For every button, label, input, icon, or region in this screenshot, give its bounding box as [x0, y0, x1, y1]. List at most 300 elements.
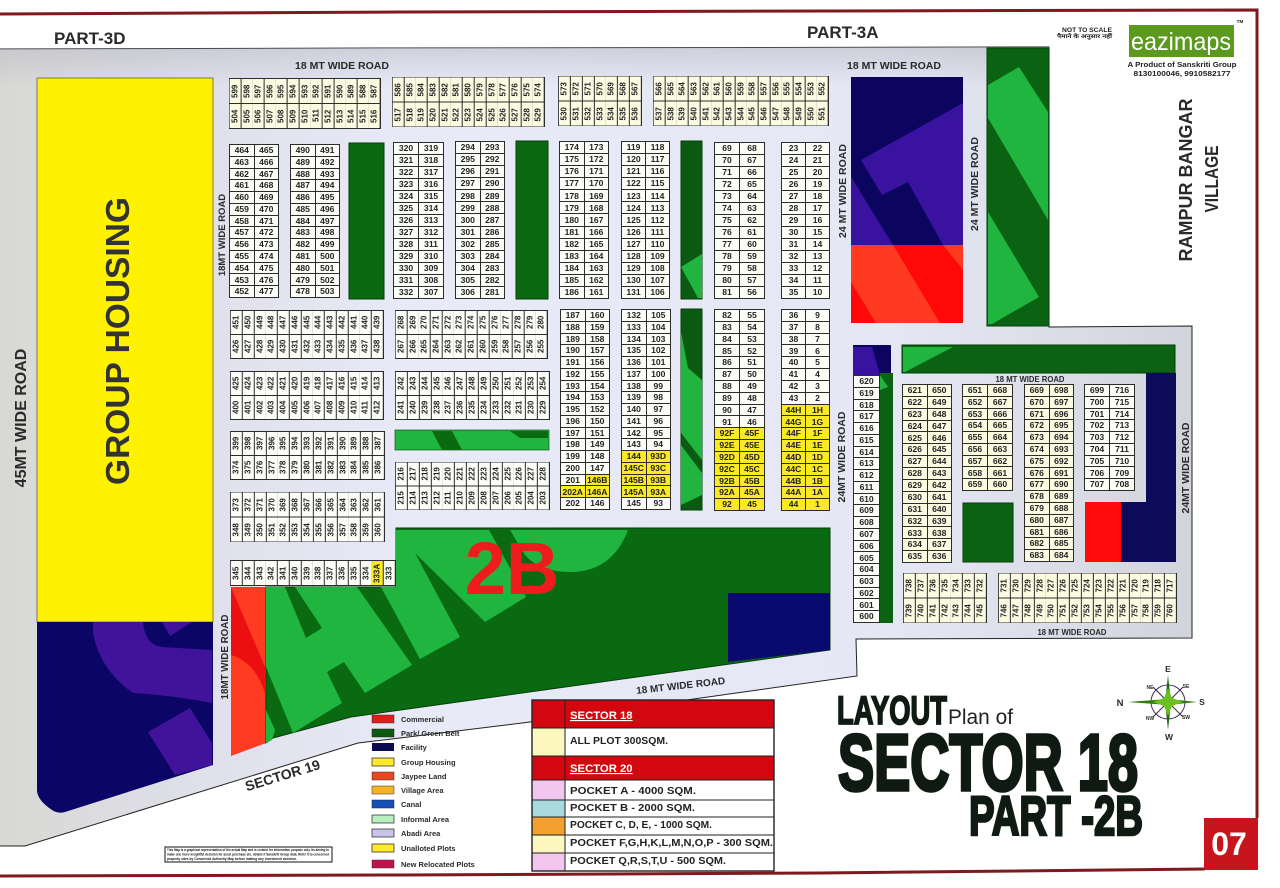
plots 621-650: 638: [932, 528, 946, 538]
plots 146-160 and 187-202: 199: [566, 451, 580, 461]
plots 10-35: 17: [813, 203, 822, 213]
plots 717-731 and 746-760: 746: [999, 604, 1008, 617]
plots 106-131: 123: [626, 191, 641, 201]
legend: Facility: [401, 743, 428, 752]
plots 599-587 and 504-516: 588: [358, 84, 367, 98]
plots 307-332: 324: [399, 191, 413, 201]
plots 146-160 and 187-202: 156: [590, 357, 604, 367]
plots 161-186: 162: [589, 275, 603, 285]
plots 229-254: 247: [456, 377, 465, 390]
plots 255-280: 266: [408, 340, 417, 353]
legend: Park/ Green Belt: [401, 729, 460, 738]
plots 56-81: 75: [722, 215, 732, 225]
plots 161-186: 169: [589, 191, 603, 201]
label: 18mt road bottom right: 18 MT WIDE ROAD: [1038, 627, 1106, 637]
plots 106-131: 112: [651, 215, 664, 225]
plots 478-503: 497: [320, 216, 334, 226]
plots 56-81: 72: [722, 179, 732, 189]
plots 717-731 and 746-760: 728: [1035, 579, 1044, 592]
panel: plot size table: POCKET Q,R,S,T,U - 500 SQM.: [570, 856, 726, 867]
plots 452-477: 458: [235, 216, 249, 226]
plots 229-254: 236: [456, 401, 465, 414]
plots 400-425: 408: [326, 401, 335, 414]
legend: Informal Area: [401, 815, 450, 824]
plots 732-745: 736: [928, 579, 937, 592]
panel: facility block top right: [851, 77, 963, 323]
plots 1-9 and 36-44: 44D: [786, 452, 801, 462]
plots 478-503: 490: [296, 145, 310, 155]
plots 10-35: 14: [813, 239, 822, 249]
plots 10-35: 10: [813, 287, 822, 297]
plots 93-105 and 132-145: 135: [627, 345, 641, 355]
plots 717-731 and 746-760: 751: [1059, 604, 1068, 617]
plots 374-399: 383: [338, 461, 347, 474]
plots 566-552 and 537-551: 537: [654, 107, 663, 120]
plots 478-503: 498: [320, 227, 334, 237]
plots 452-477: [229, 144, 279, 298]
plots 56-81: 59: [747, 251, 757, 261]
plots 281-306: 304: [461, 263, 475, 273]
plots 56-81: 57: [747, 275, 757, 285]
plots 307-332: 312: [424, 227, 438, 237]
plots 566-552 and 537-551: 562: [701, 82, 710, 95]
plots 146-160 and 187-202: 152: [590, 404, 604, 414]
plots 281-306: 281: [485, 287, 499, 297]
plots 651-668: 666: [993, 409, 1007, 419]
plots 106-131: 115: [651, 178, 664, 188]
panel: green strip horizontal: [395, 430, 549, 450]
plots 10-35: 28: [789, 203, 798, 213]
plots 374-399: 380: [302, 461, 311, 474]
plots 566-552 and 537-551: 553: [806, 82, 815, 95]
plots 333-345: 334: [361, 566, 370, 580]
plots 106-131: 121: [626, 166, 641, 176]
plots 426-451: 451: [231, 316, 240, 329]
plots 717-731 and 746-760: 749: [1035, 604, 1044, 617]
plots 374-399: 399: [231, 437, 240, 450]
plots 699-716: 708: [1115, 479, 1129, 489]
plots 229-254: 231: [515, 401, 524, 414]
plots 203-228: 227: [527, 468, 536, 481]
panel: plot size table: POCKET A - 4000 SQM.: [570, 786, 696, 797]
plots 255-280: 255: [537, 340, 546, 353]
plots 255-280: 259: [490, 340, 499, 353]
plots 93-105 and 132-145: 136: [627, 357, 641, 367]
plots 348-373: [230, 492, 385, 542]
plots 56-81: 68: [747, 143, 757, 153]
plots 586-574 and 517-529: 522: [452, 108, 461, 121]
plots 717-731 and 746-760: 747: [1011, 604, 1020, 617]
plots 45-55 and 82-92: 48: [747, 393, 757, 403]
plots 478-503: 484: [296, 216, 310, 226]
plots 45-55 and 82-92: 92D: [719, 452, 735, 462]
plots 699-716: [1084, 384, 1135, 491]
plots 45-55 and 82-92: 92A: [719, 487, 735, 497]
plots 1-9 and 36-44: 38: [789, 334, 798, 344]
plots 599-587 and 504-516: 511: [312, 110, 321, 122]
plots 93-105 and 132-145: 145A: [623, 487, 644, 497]
plots 600-620: 608: [859, 517, 874, 527]
plots 255-280: 275: [478, 316, 487, 329]
plots 161-186: 186: [565, 287, 579, 297]
plots 348-373: 355: [314, 523, 323, 536]
label: top road: 18 MT WIDE ROAD: [295, 60, 389, 72]
plots 717-731 and 746-760: 758: [1142, 604, 1151, 617]
plots 374-399: 389: [350, 437, 359, 450]
plots 1-9 and 36-44: 44G: [785, 417, 802, 427]
plots 255-280: 261: [466, 340, 475, 353]
plots 717-731 and 746-760: 759: [1154, 604, 1163, 617]
plots 599-587 and 504-516: 509: [288, 109, 297, 123]
plots 478-503: 487: [296, 180, 310, 190]
plots 669-698: 692: [1054, 456, 1068, 466]
plots 307-332: 322: [399, 167, 413, 177]
plots 566-552 and 537-551: 550: [806, 107, 815, 120]
plots 621-650: 640: [932, 504, 946, 514]
plots 56-81: 70: [722, 155, 732, 165]
plots 374-399: 374: [231, 461, 240, 474]
plots 1-9 and 36-44: 1C: [812, 464, 823, 474]
plots 717-731 and 746-760: 718: [1154, 579, 1163, 592]
plots 573-567 and 530-536: 535: [619, 107, 628, 120]
plots 348-373: 362: [362, 498, 371, 511]
plots 669-698: 687: [1054, 515, 1068, 525]
plots 93-105 and 132-145: 141: [627, 416, 641, 426]
plots 573-567 and 530-536: 573: [559, 82, 568, 95]
panel: group housing: [37, 78, 213, 622]
plots 281-306: [455, 141, 505, 299]
plots 717-731 and 746-760: 726: [1059, 579, 1068, 592]
plots 307-332: 316: [424, 179, 438, 189]
plots 281-306: 296: [461, 166, 475, 176]
panel: green strip 2: [516, 141, 548, 299]
label: rampur bangar village: [1176, 98, 1222, 262]
plots 255-280: 276: [490, 316, 499, 329]
plots 374-399: 375: [243, 461, 252, 474]
plots 93-105 and 132-145: 138: [627, 381, 641, 391]
plots 669-698: 690: [1054, 479, 1068, 489]
plots 426-451: 447: [278, 316, 287, 329]
plots 452-477: 454: [235, 263, 249, 273]
plots 717-731 and 746-760: 724: [1082, 579, 1091, 592]
plots 452-477: 474: [259, 251, 273, 261]
plots 161-186: 185: [565, 275, 579, 285]
plots 699-716: 714: [1115, 409, 1129, 419]
plots 229-254: 248: [467, 377, 476, 390]
label: 2B: 2B: [465, 527, 559, 610]
plots 573-567 and 530-536: 568: [619, 82, 628, 95]
plots 255-280: 277: [502, 316, 511, 329]
panel: green strip 3: [681, 141, 702, 299]
plots 1-9 and 36-44: 1G: [812, 417, 823, 427]
plots 669-698: 674: [1030, 444, 1044, 454]
plots 203-228: 206: [503, 491, 512, 504]
plots 1-9 and 36-44: 44F: [786, 428, 801, 438]
plots 307-332: [393, 142, 444, 299]
plots 600-620: 603: [859, 576, 874, 586]
plots 400-425: 405: [290, 401, 299, 414]
plots 566-552 and 537-551: 541: [701, 107, 710, 120]
plots 161-186: 174: [565, 142, 579, 152]
plots 452-477: 466: [259, 157, 273, 167]
plots 621-650: 634: [908, 539, 922, 549]
plots 56-81: 74: [722, 203, 732, 213]
plots 1-9 and 36-44: 3: [815, 381, 820, 391]
plots 452-477: 459: [235, 204, 249, 214]
plots 93-105 and 132-145: 97: [653, 404, 663, 414]
not to scale note: [1056, 27, 1113, 40]
plots 400-425: 413: [373, 377, 382, 390]
plots 348-373: 367: [302, 498, 311, 511]
plots 348-373: 352: [279, 523, 288, 536]
plots 255-280: 257: [513, 340, 522, 353]
plots 651-668: 662: [993, 456, 1007, 466]
plots 732-745: [903, 573, 987, 623]
plots 400-425: 421: [278, 377, 287, 390]
plots 586-574 and 517-529: 580: [463, 83, 472, 96]
plots 621-650: [902, 384, 952, 563]
plots 161-186: 182: [565, 239, 579, 249]
plots 599-587 and 504-516: 515: [358, 109, 367, 123]
plots 307-332: 332: [399, 287, 413, 297]
plots 307-332: 329: [399, 251, 413, 261]
plots 203-228: 216: [396, 468, 405, 481]
plots 106-131: 114: [651, 191, 664, 201]
plots 426-451: 426: [231, 340, 240, 353]
plots 651-668: 656: [968, 444, 982, 454]
plots 400-425: 420: [290, 377, 299, 390]
plots 374-399: 398: [243, 437, 252, 450]
icon: compass: S: [1199, 697, 1205, 707]
plots 1-9 and 36-44: 40: [789, 357, 798, 367]
plots 56-81: 56: [747, 287, 757, 297]
plots 93-105 and 132-145: 145B: [623, 475, 644, 485]
plots 106-131: 106: [650, 287, 665, 297]
plots 281-306: 301: [461, 227, 475, 237]
plots 1-9 and 36-44: 1B: [812, 476, 823, 486]
plots 400-425: 423: [255, 377, 264, 390]
plots 599-587 and 504-516: 599: [230, 84, 239, 98]
plots 333-345: 345: [231, 566, 240, 580]
plots 374-399: 395: [279, 437, 288, 450]
panel: plot size table: ALL PLOT 300SQM.: [570, 736, 668, 747]
label: 18mt road inner: 18 MT WIDE ROAD: [996, 374, 1064, 384]
plots 229-254: 244: [420, 377, 429, 390]
plots 599-587 and 504-516: 505: [242, 109, 251, 123]
plots 333-345: 341: [279, 566, 288, 580]
plots 651-668: 659: [968, 479, 982, 489]
plots 621-650: 629: [908, 480, 922, 490]
title: layout plan of sector 18 part 2B: SECTOR 18: [838, 718, 1138, 807]
plots 452-477: 463: [235, 157, 249, 167]
plots 699-716: 707: [1090, 479, 1104, 489]
plots 45-55 and 82-92: 92B: [719, 476, 735, 486]
plots 717-731 and 746-760: 729: [1023, 579, 1032, 592]
plots 599-587 and 504-516: 597: [254, 84, 263, 98]
plots 106-131: 126: [626, 227, 641, 237]
plots 478-503: [290, 144, 340, 298]
plots 93-105 and 132-145: 99: [653, 381, 663, 391]
plots 586-574 and 517-529: 521: [440, 108, 449, 121]
plots 669-698: 682: [1030, 538, 1044, 548]
label: 18mt road lower: 18MT WIDE ROAD: [220, 615, 231, 699]
plots 452-477: 471: [259, 216, 273, 226]
plots 717-731 and 746-760: 731: [999, 579, 1008, 592]
plots 203-228: [395, 462, 550, 510]
plots 600-620: 610: [859, 494, 874, 504]
plots 106-131: 109: [650, 251, 665, 261]
plots 374-399: 386: [374, 461, 383, 474]
plots 651-668: 657: [968, 456, 982, 466]
plots 621-650: 624: [908, 421, 922, 431]
plots 45-55 and 82-92: 82: [722, 310, 732, 320]
plots 45-55 and 82-92: 45A: [744, 487, 760, 497]
plots 45-55 and 82-92: [714, 309, 765, 511]
plots 56-81: 66: [747, 167, 757, 177]
plots 146-160 and 187-202: 195: [566, 404, 580, 414]
plots 161-186: 181: [565, 227, 579, 237]
plots 669-698: 671: [1030, 409, 1044, 419]
plots 586-574 and 517-529: 582: [440, 83, 449, 96]
plots 732-745: 735: [940, 579, 949, 592]
plots 93-105 and 132-145: 93D: [650, 451, 666, 461]
plots 106-131: 127: [626, 239, 641, 249]
plots 106-131: 131: [626, 287, 641, 297]
plots 586-574 and 517-529: 575: [522, 83, 531, 96]
plots 651-668: 653: [968, 409, 982, 419]
plots 281-306: 284: [485, 251, 499, 261]
plots 717-731 and 746-760: 757: [1130, 604, 1139, 617]
plots 1-9 and 36-44: 44B: [786, 476, 801, 486]
plots 203-228: 224: [491, 468, 500, 481]
plots 452-477: 464: [235, 145, 249, 155]
plots 566-552 and 537-551: 554: [794, 82, 803, 95]
plots 573-567 and 530-536: 531: [571, 107, 580, 120]
plots 586-574 and 517-529: 524: [475, 108, 484, 121]
panel: main green belt: [266, 528, 830, 743]
title: layout plan of sector 18 part 2B: Plan of: [948, 706, 1013, 729]
plots 426-451: 430: [278, 340, 287, 353]
plots 651-668: 654: [968, 420, 982, 430]
plots 651-668: 668: [993, 385, 1007, 395]
plots 478-503: 501: [320, 263, 334, 273]
plots 333-345: 333A: [373, 563, 382, 583]
plots 161-186: 172: [589, 154, 603, 164]
plots 669-698: 684: [1054, 550, 1068, 560]
plots 255-280: 272: [443, 316, 452, 329]
icon: compass: SW: [1182, 715, 1190, 721]
plots 374-399: 382: [326, 461, 335, 474]
plots 586-574 and 517-529: 574: [534, 83, 543, 96]
logo: eazimaps: eazimaps: [1131, 28, 1231, 56]
plots 333-345: [230, 560, 396, 586]
plots 1-9 and 36-44: 5: [815, 357, 820, 367]
plots 669-698: 677: [1030, 479, 1044, 489]
plots 45-55 and 82-92: 54: [747, 322, 757, 332]
plots 348-373: 363: [350, 498, 359, 511]
plots 333-345: 340: [290, 566, 299, 580]
plots 45-55 and 82-92: 86: [722, 357, 732, 367]
plots 669-698: 693: [1054, 444, 1068, 454]
plots 566-552 and 537-551: 555: [783, 82, 792, 95]
plots 566-552 and 537-551: 556: [771, 82, 780, 95]
plots 717-731 and 746-760: 717: [1166, 579, 1175, 592]
plots 333-345: 335: [349, 566, 358, 580]
plots 106-131: 119: [627, 142, 640, 152]
plots 452-477: 461: [235, 180, 249, 190]
plots 146-160 and 187-202: 146B: [587, 475, 608, 485]
plots 348-373: 370: [267, 498, 276, 511]
plots 281-306: 300: [461, 215, 475, 225]
disclaimer box: property sites by Concerned Authority Map before making any investment decision.: [167, 857, 297, 861]
plots 374-399: [230, 431, 385, 480]
plots 586-574 and 517-529: 586: [393, 83, 402, 96]
plots 621-650: 641: [932, 492, 946, 502]
plots 717-731 and 746-760: [998, 573, 1177, 623]
plots 478-503: 500: [320, 251, 334, 261]
plots 203-228: 208: [479, 491, 488, 504]
plots 307-332: 317: [424, 167, 438, 177]
plots 281-306: 298: [461, 191, 475, 201]
plots 348-373: 357: [338, 523, 347, 536]
plots 651-668: [962, 384, 1013, 491]
plots 93-105 and 132-145: 145C: [623, 463, 644, 473]
title: layout plan of sector 18 part 2B: LAYOUT: [837, 689, 947, 733]
plots 161-186: 166: [589, 227, 603, 237]
plots 669-698: 679: [1030, 503, 1044, 513]
plots 478-503: 489: [296, 157, 310, 167]
plots 10-35: 15: [813, 227, 822, 237]
plots 281-306: 292: [485, 154, 499, 164]
plots 669-698: [1024, 384, 1074, 562]
plots 717-731 and 746-760: 725: [1071, 579, 1080, 592]
plots 400-425: 400: [231, 401, 240, 414]
plots 161-186: [559, 141, 609, 299]
plots 281-306: 285: [485, 239, 499, 249]
plots 146-160 and 187-202: 188: [566, 322, 580, 332]
plots 10-35: [781, 142, 830, 299]
plots 10-35: 13: [813, 251, 822, 261]
label: 45mt road: 45MT WIDE ROAD: [13, 349, 30, 487]
plots 426-451: 433: [314, 340, 323, 353]
plots 56-81: 63: [747, 203, 757, 213]
plots 566-552 and 537-551: 542: [713, 107, 722, 120]
plots 45-55 and 82-92: 45F: [745, 428, 759, 438]
legend: Commercial: [401, 715, 444, 724]
plots 1-9 and 36-44: 44E: [786, 440, 801, 450]
plots 307-332: 331: [399, 275, 413, 285]
plots 255-280: 260: [478, 340, 487, 353]
plots 621-650: 622: [908, 397, 922, 407]
plots 106-131: 113: [651, 203, 664, 213]
plots 146-160 and 187-202: 155: [590, 369, 604, 379]
plots 374-399: 388: [362, 437, 371, 450]
plots 426-451: 436: [349, 340, 358, 353]
plots 400-425: 407: [314, 401, 323, 414]
plots 621-650: 627: [908, 456, 922, 466]
not to scale note: NOT TO SCALE: [1062, 27, 1113, 34]
plots 732-745: 740: [916, 604, 925, 617]
plots 573-567 and 530-536: [558, 76, 642, 126]
plots 1-9 and 36-44: 44A: [786, 487, 801, 497]
plots 669-698: 672: [1030, 420, 1044, 430]
plots 348-373: 359: [362, 523, 371, 536]
plots 93-105 and 132-145: 94: [653, 439, 663, 449]
plots 599-587 and 504-516: 508: [277, 109, 286, 123]
plots 10-35: 24: [789, 155, 798, 165]
page number badge: 07: [1211, 826, 1247, 862]
plots 161-186: 161: [589, 287, 603, 297]
